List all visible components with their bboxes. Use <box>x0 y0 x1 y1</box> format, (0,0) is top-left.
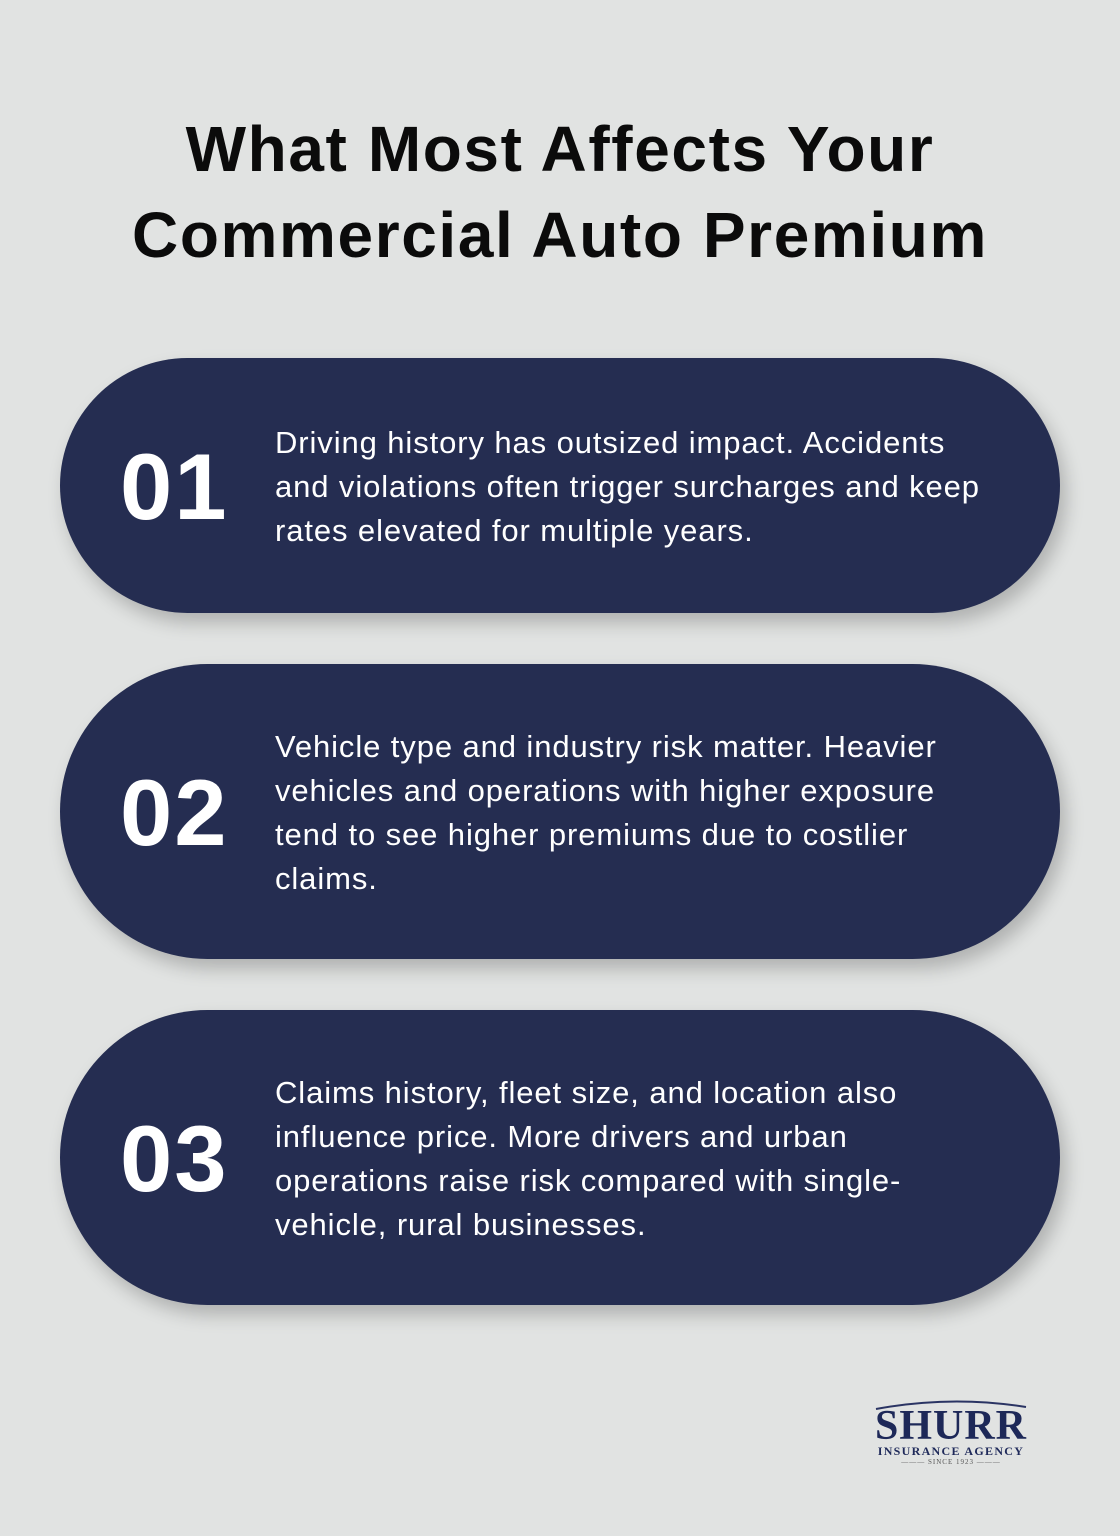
number 02: 02 <box>120 760 229 865</box>
text 01 <box>275 425 980 548</box>
text 02 <box>275 729 937 896</box>
logo: INSURANCE AGENCY <box>878 1444 1024 1458</box>
text 01: rates elevated for multiple years. <box>275 513 754 548</box>
panel: item 02 <box>60 664 1060 959</box>
text 02: vehicles and operations with higher exposure <box>275 773 935 808</box>
number 01: 01 <box>120 434 229 539</box>
text 02: claims. <box>275 861 378 896</box>
logo: ——— SINCE 1923 ——— <box>901 1458 1001 1466</box>
logo: SHURR <box>875 1403 1027 1449</box>
panel: item 01 <box>60 358 1060 613</box>
text 02: Vehicle type and industry risk matter. Heavier <box>275 729 937 764</box>
text 03 <box>275 1075 901 1242</box>
title: What Most Affects Your <box>186 113 934 185</box>
text 03: Claims history, fleet size, and location also <box>275 1075 897 1110</box>
text 03: vehicle, rural businesses. <box>275 1207 646 1242</box>
title <box>132 113 988 271</box>
text 02: tend to see higher premiums due to costlier <box>275 817 908 852</box>
number 03: 03 <box>120 1106 229 1211</box>
text 01: and violations often trigger surcharges and keep <box>275 469 980 504</box>
text 03: operations raise risk compared with single- <box>275 1163 901 1198</box>
title: Commercial Auto Premium <box>132 199 988 271</box>
text 01: Driving history has outsized impact. Accidents <box>275 425 945 460</box>
panel: item 03 <box>60 1010 1060 1305</box>
text 03: influence price. More drivers and urban <box>275 1119 848 1154</box>
